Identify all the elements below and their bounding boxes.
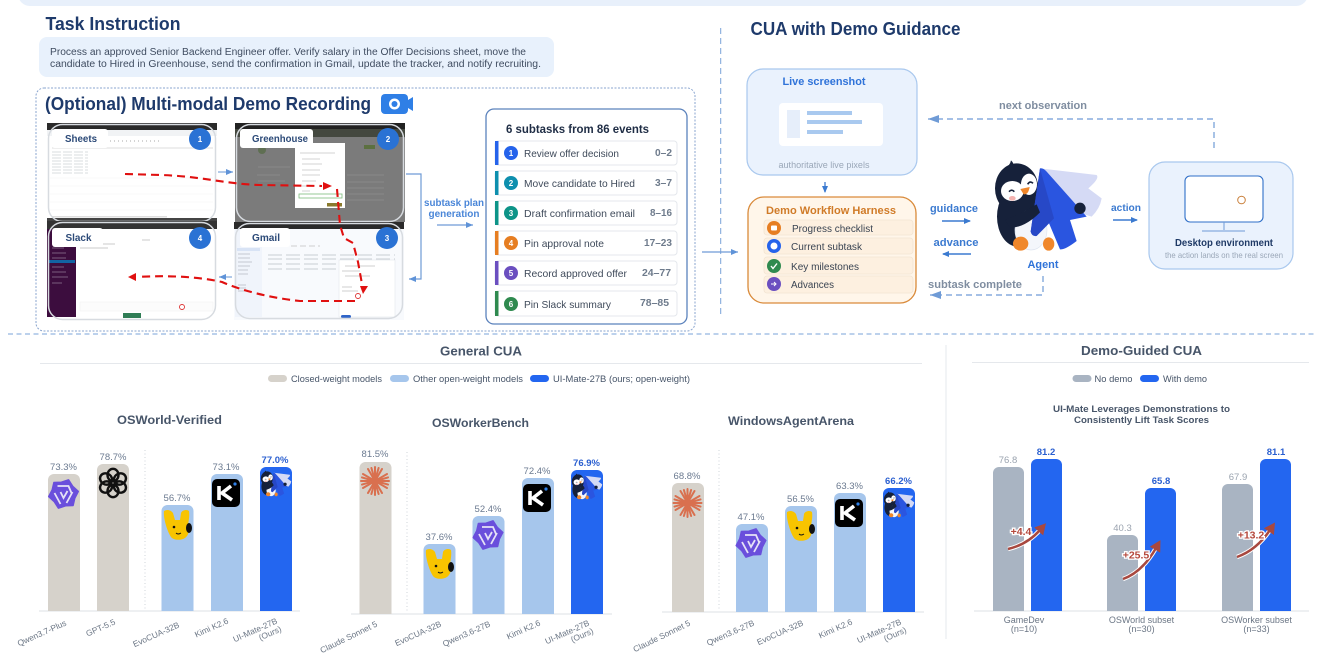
subtask 3 [495,201,677,225]
label: subtask complete: subtask complete [928,279,1022,291]
x-axis labels: EvoCUA-32B [393,619,443,648]
icon: ui-mate [572,474,602,499]
arrow: greenhouse to gmail bracket [406,174,421,279]
tab: greenhouse: Greenhouse [252,133,308,145]
heading: general CUA: General CUA [440,344,523,358]
bars [993,459,1291,611]
x-axis labels: OSWorker subset [1221,615,1292,625]
subtask 4: 17–23 [644,237,672,249]
top banner [18,0,1308,6]
subtask 5: Record approved offer [524,268,627,280]
arrow: demo to harness [702,251,738,253]
x-axis labels: (n=33) [1243,624,1270,634]
arrow: advance [943,253,971,255]
x-axis labels: Kimi K2.6 [193,616,230,639]
chart title: UI-Mate Leverages Demonstrations to [1053,404,1230,415]
red dashed path: gmail to slack [128,273,355,301]
values: 81.2 [1037,447,1055,458]
chart title [1053,404,1230,426]
label: subtask plan generation [424,198,484,220]
label: action: action [1111,202,1141,214]
x-axis labels: GameDev [1004,615,1045,625]
x-axis labels: Claude Sonnet 5 [631,618,692,654]
panel: multi-modal demo recording [36,88,695,331]
lift labels: +13.2 [1238,530,1264,542]
chart title: Consistently Lift Task Scores [1074,415,1209,426]
subtask 1: 1 [509,149,514,158]
tab: slack: Slack [66,232,92,244]
values: 47.1% [738,512,765,523]
icon: ui-mate [261,471,291,496]
label: next observation: next observation [999,100,1087,112]
label: guidance: guidance [930,203,978,215]
x-axis labels: EvoCUA-32B [755,618,805,647]
legend: general CUA [268,374,690,385]
divider: demo section [945,345,947,639]
red dashed path: sheets to greenhouse [125,174,332,190]
label: subtask plan generation: generation [428,209,480,220]
row: advances: Advances [791,280,834,291]
badge: step 3 [376,227,398,249]
icon: claude [361,467,389,495]
row: key milestones: Key milestones [791,262,859,273]
row: current subtask: Current subtask [791,242,863,253]
subtask 5 [495,261,677,285]
heading: demo recording: (Optional) Multi-modal Demo Recording [45,94,371,114]
icon: kimi [523,484,551,512]
values [999,447,1286,534]
x-axis labels [318,618,595,655]
legend: general CUA: Other open-weight models [413,374,523,385]
panel: demo workflow harness: Demo Workflow Harness [766,205,896,217]
x-axis labels: Qwen3.6-27B [441,619,492,649]
icon: evocua [787,511,815,541]
heading: CUA with demo guidance: CUA with Demo Guidance [750,19,960,39]
x-axis labels: GPT-5.5 [84,617,117,639]
screenshot: greenhouse [235,123,405,222]
arrow: action [1113,219,1137,221]
panel: live screenshot: Live screenshot [782,76,866,88]
x-axis labels: (n=10) [1011,624,1037,634]
subtask 6 [495,291,677,316]
arrow: to subtask panel [437,224,473,226]
subtask 5: 5 [509,269,514,278]
arrow: guidance [942,220,970,222]
icon: monitor [1185,176,1263,231]
values: 73.3% [50,462,78,473]
divider: horizontal [8,333,1316,335]
values: 73.1% [213,462,240,473]
subtask 4: 4 [509,239,514,248]
red dashed path: greenhouse to gmail [337,189,368,294]
bars [48,464,292,611]
values: 81.5% [362,449,389,460]
icon: qwen [736,529,766,557]
values [50,452,289,504]
values: 40.3 [1113,523,1132,534]
x-axis labels: (n=30) [1128,624,1155,634]
bars [360,462,603,614]
values: 66.2% [885,476,913,487]
label: subtask plan generation: subtask plan [424,198,484,209]
badge: step 2: 2 [386,135,391,144]
subtask 4: Pin approval note [524,238,604,250]
subtask 2: 2 [509,179,514,188]
panel: live screenshot: authoritative live pixels [778,160,870,170]
screenshot: slack [47,221,217,320]
row: current subtask [764,238,913,254]
lift labels [1011,526,1264,562]
row: progress checklist [764,220,913,235]
chart title: OSWorld-Verified [117,413,222,427]
subtask 4 [495,231,677,255]
panel: subtasks [486,109,687,324]
x-axis labels: Kimi K2.6 [817,617,854,640]
icon: qwen [473,521,503,549]
badge: step 3: 3 [385,234,390,243]
lift labels: +25.5 [1123,550,1149,562]
values: 76.9% [573,458,601,469]
panel: desktop environment [1149,162,1293,269]
x-axis labels: UI-Mate-27B [855,617,903,645]
panel: task instruction text: Process an approved Senior Backend Engineer offer. Verify salary in the Offer Decisions sheet, move the [50,47,526,58]
legend: demo-guided [1072,374,1207,385]
values: 76.8 [999,455,1017,466]
icon: kimi [212,479,240,507]
arrow: osworld lift [1123,548,1156,579]
badge: step 1: 1 [198,135,203,144]
values [362,449,601,543]
x-axis labels: OSWorld subset [1109,615,1175,625]
icon: claude [674,489,702,517]
badge: step 4 [189,227,211,249]
label: agent: Agent [1028,259,1059,271]
values: 37.6% [426,532,453,543]
tab: gmail: Gmail [252,232,280,244]
subtask 5: 24–77 [642,267,671,279]
arrow: sheets to greenhouse [218,171,233,173]
arrow: subtask complete [930,276,1043,295]
icon: penguin agent [995,160,1102,251]
values: 63.3% [836,481,864,492]
values: 52.4% [475,504,502,515]
values: 81.1 [1267,447,1286,458]
chart: OSWorkerBench [318,416,612,655]
x-axis labels: EvoCUA-32B [131,620,181,649]
tab: greenhouse [240,129,313,148]
subtask 1: Review offer decision [524,148,619,160]
subtask 2: Move candidate to Hired [524,178,635,190]
icon: evocua [164,510,192,540]
icon: openai [98,469,128,497]
screenshot: sheets [47,123,217,222]
icon: camera [381,94,413,114]
row: key milestones [764,257,913,274]
x-axis labels: Qwen3.7-Plus [16,618,68,648]
badge: step 2 [377,128,399,150]
subtask 6: 78–85 [640,297,669,309]
arrow: screenshot to harness [824,182,826,192]
bars [672,483,915,612]
x-axis labels: (Ours) [257,624,283,642]
subtask 3: 3 [509,209,514,218]
values: 72.4% [524,466,551,477]
panel: task instruction text: candidate to Hired in Greenhouse, send the confirmation in Gmail, update the tracker, and notify recruiting. [50,59,541,70]
values: 65.8 [1152,476,1170,487]
lift labels: +4.4 [1011,526,1032,538]
x-axis labels: (Ours) [882,625,908,643]
panel: desktop environment: Desktop environment [1175,237,1273,249]
badge: step 4: 4 [198,234,203,243]
values: 68.8% [674,471,701,482]
subtask 2 [495,171,677,195]
row: progress checklist: Progress checklist [792,224,873,235]
panel title: 6 subtasks from 86 events [506,122,649,136]
values [674,471,913,523]
subtask 6: 6 [509,300,514,309]
divider: vertical [720,28,722,318]
panel: demo workflow harness [748,197,916,303]
subtask 3: 8–16 [650,207,672,219]
values: 56.5% [787,494,815,505]
x-axis labels: Claude Sonnet 5 [318,619,379,655]
legend: general CUA: Closed-weight models [291,374,382,385]
icon: kimi [835,499,863,527]
arrow: gamedev lift [1008,530,1040,549]
icon: qwen [49,480,78,508]
tab: gmail [240,228,290,247]
tab: slack [52,228,103,247]
x-axis labels [16,616,283,649]
x-axis labels: Kimi K2.6 [505,618,542,641]
subtask 1: 0–2 [655,147,672,159]
chart: demo lift [974,404,1309,634]
subtask 3: Draft confirmation email [524,208,635,220]
panel: live screenshot [747,69,917,175]
chart: WindowsAgentArena [631,414,924,654]
x-axis labels: UI-Mate-27B [543,618,591,646]
legend: demo-guided: No demo [1094,374,1132,385]
values: 56.7% [164,493,191,504]
icon: ui-mate [884,492,914,517]
tab: sheets [52,129,108,148]
panel: task instruction text [39,37,554,77]
legend: general CUA: UI-Mate-27B (ours; open-weight) [553,374,690,385]
values: 67.9 [1229,472,1247,483]
click marker [356,294,360,298]
arrow: next observation [928,119,1214,148]
tab: sheets: Sheets [65,133,97,145]
subtask 1 [495,141,677,165]
x-axis labels: UI-Mate-27B [231,616,279,644]
x-axis labels: Qwen3.6-27B [705,618,756,648]
panel: desktop environment: the action lands on the real screen [1165,250,1283,260]
legend: demo-guided: With demo [1163,374,1207,385]
icon: evocua [426,549,454,579]
x-axis labels: (Ours) [569,626,595,644]
heading: task instruction: Task Instruction [46,14,180,34]
subtask 2: 3–7 [655,177,672,189]
values: 78.7% [100,452,127,463]
arrow: osworker lift [1237,530,1270,557]
row: advances [764,276,913,293]
arrow: gmail to slack [219,276,232,278]
chart title: WindowsAgentArena [728,414,854,428]
chart: OSWorld-Verified [16,413,300,649]
subtask 6: Pin Slack summary [524,299,612,311]
badge: step 1 [189,128,211,150]
label: advance: advance [934,237,978,249]
screenshot: gmail [234,222,404,320]
x-axis labels [1004,615,1292,634]
chart title: OSWorkerBench [432,416,529,430]
values: 77.0% [262,455,289,466]
heading: demo-guided CUA: Demo-Guided CUA [1081,343,1203,358]
x-axis labels [631,617,908,654]
